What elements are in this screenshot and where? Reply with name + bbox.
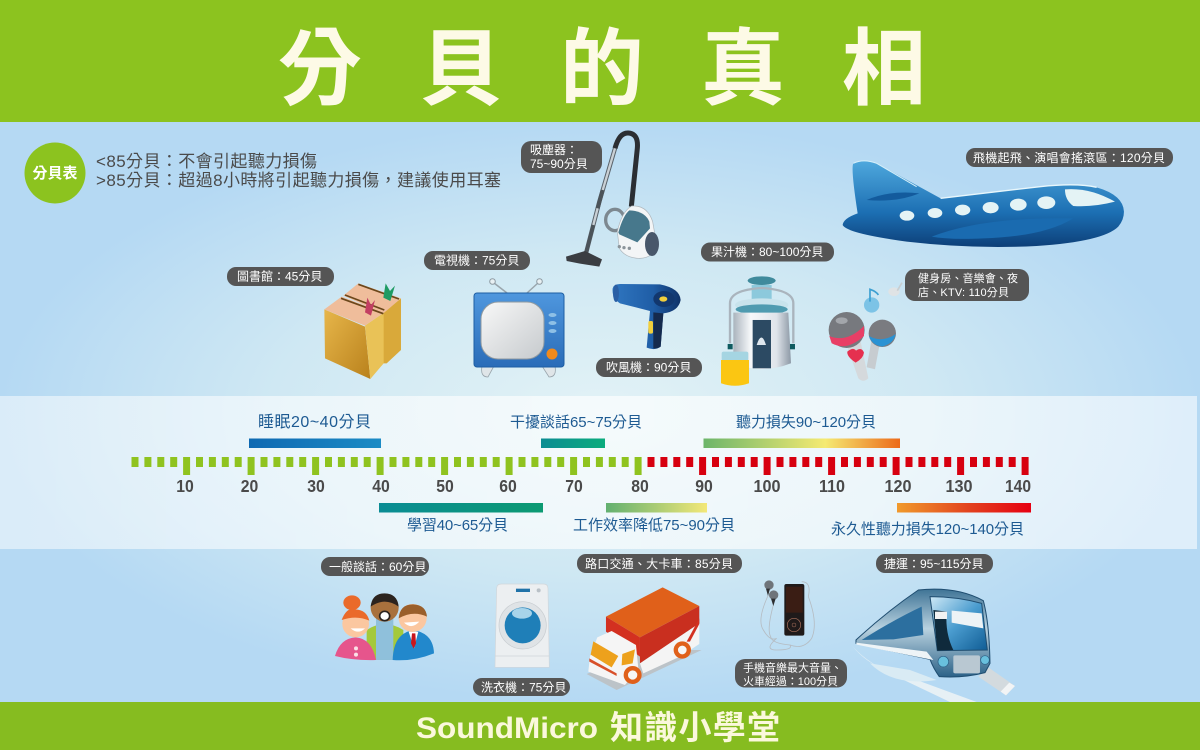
icon: microphones [829,283,902,381]
label: washing machine [473,678,570,696]
label: television: 電視機：75分貝 [434,252,519,268]
label: library [227,267,334,286]
scale numbers: 20 [241,476,258,496]
range label: hearing loss [704,414,900,448]
label: juicer [701,242,834,262]
scale numbers: 10 [176,476,194,496]
scale numbers: 110 [819,476,845,496]
icon: truck [587,587,702,690]
icon: metro train [852,589,1015,702]
footer text [416,709,780,746]
icon: music player and earphones [761,580,814,650]
range label: conversation interference [510,414,642,448]
label: conversation: 一般談話：60分貝 [329,559,426,574]
icon: people [335,593,434,660]
legend text: <85分貝：不會引起聽力損傷 [96,152,317,171]
label: juicer: 果汁機：80~100分貝 [711,244,823,259]
scale numbers: 90 [695,476,713,496]
label: television [424,251,530,270]
label: library: 圖書館：45分貝 [237,268,322,284]
label: gym, concert, KTV [905,269,1029,301]
legend: decibel table [24,142,501,204]
label: traffic, truck: 路口交通、大卡車：85分貝 [585,556,733,571]
legend text [96,152,501,190]
footer text: 知識小學堂 [610,709,780,746]
label: gym, concert, KTV: 店、KTV: 110分貝 [918,285,1009,299]
scale numbers: 100 [754,476,781,496]
background [0,122,1200,702]
scale numbers: 140 [1005,476,1031,496]
label: metro [876,554,993,573]
label: washing machine: 洗衣機：75分貝 [481,680,566,694]
icon: airplane [843,161,1124,247]
range label: work efficiency [573,503,735,534]
label: vacuum: 吸塵器： [530,142,578,157]
label: hair dryer: 吹風機：90分貝 [606,360,691,374]
range label: permanent hearing loss: 永久性聽力損失120~140分貝 [831,521,1024,538]
scale numbers: 70 [565,476,583,496]
label: airplane [966,148,1173,167]
label: gym, concert, KTV: 健身房、音樂會、夜 [918,271,1018,285]
scale ticks red [648,457,1029,475]
icon: television [474,279,564,377]
scale numbers: 60 [499,476,517,496]
range label: sleep [249,413,381,448]
footer text: SoundMicro [416,712,598,745]
scale numbers: 120 [884,476,912,496]
title: 分貝的真相 [278,22,926,116]
label: airplane: 飛機起飛、演唱會搖滾區：120分貝 [973,150,1165,165]
footer banner [0,702,1200,750]
legend badge: 分貝表 [32,164,78,182]
scale numbers: 40 [372,476,390,496]
scale numbers [176,476,1031,496]
scale ticks green [132,457,642,475]
label: hair dryer [596,358,702,377]
icon: juicer [721,276,795,386]
range label: conversation interference: 干擾談話65~75分貝 [510,414,642,431]
label: phone music, train passing: 火車經過：100分貝 [743,674,838,688]
label: vacuum [521,141,602,173]
icon: vacuum cleaner [566,133,659,267]
icon: washing machine [495,584,549,667]
legend text: >85分貝：超過8小時將引起聽力損傷，建議使用耳塞 [96,170,501,190]
legend badge [24,142,86,204]
label: conversation [321,557,429,576]
range label: hearing loss: 聽力損失90~120分貝 [736,414,876,431]
icon: books [324,283,401,379]
label: phone music, train passing: 手機音樂最大音量、 [743,660,842,674]
title banner [0,0,1200,122]
scale numbers: 130 [946,476,973,496]
label: vacuum: 75~90分貝 [530,157,588,171]
range label: study [379,503,543,534]
icon: hair dryer [613,284,681,349]
scale numbers: 30 [307,476,325,496]
scale numbers: 50 [436,476,454,496]
scale numbers: 80 [631,476,649,496]
range label: sleep: 睡眠20~40分貝 [258,413,371,431]
range label: work efficiency: 工作效率降低75~90分貝 [573,517,735,534]
panel: decibel scale band [0,396,1197,549]
label: phone music, train passing [735,659,847,688]
label: traffic, truck [577,554,742,573]
range label: study: 學習40~65分貝 [407,516,508,534]
label: metro: 捷運：95~115分貝 [884,556,984,571]
range label: permanent hearing loss [831,503,1031,538]
